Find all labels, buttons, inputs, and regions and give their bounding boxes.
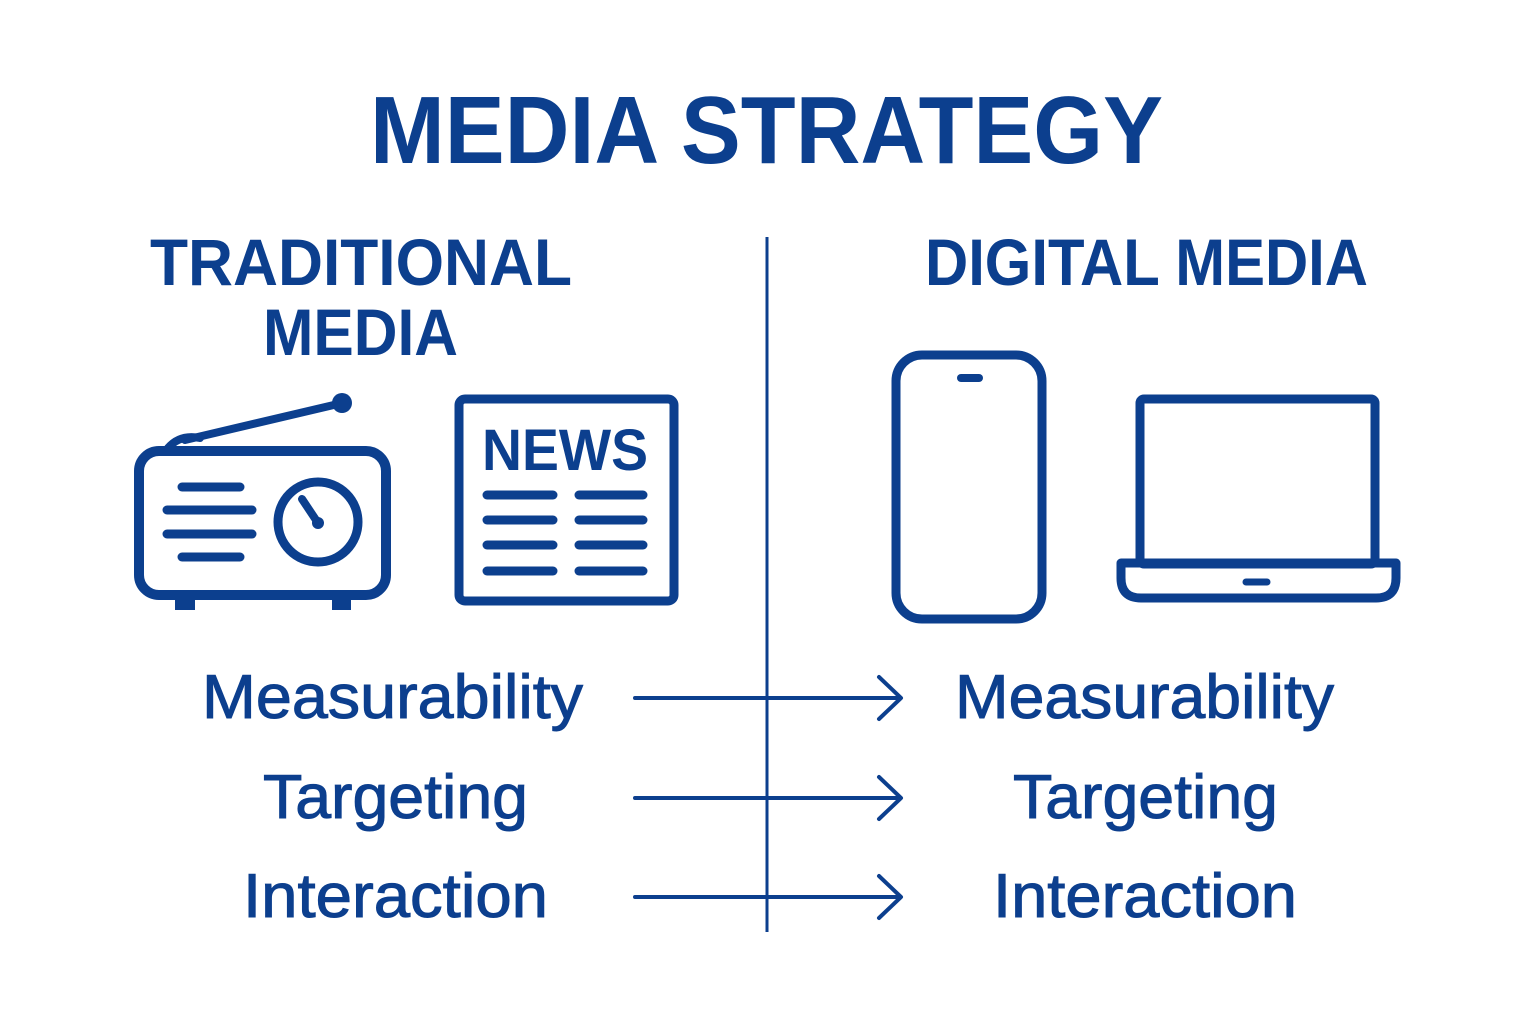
row: interaction [243,862,1297,931]
heading: traditional media: MEDIA [263,295,458,369]
icon: newspaper: NEWS [482,418,648,483]
heading: traditional media [150,225,572,369]
arrow: interaction [635,876,901,918]
icon: smartphone [896,355,1042,619]
row: interaction: Interaction [243,862,548,931]
row: targeting [263,763,1278,832]
heading: traditional media: TRADITIONAL [150,225,572,299]
heading: digital media: DIGITAL MEDIA [925,225,1368,299]
arrow: measurability [635,677,901,719]
divider line [766,237,768,932]
arrow: targeting [635,777,901,819]
row: interaction: Interaction [993,862,1297,931]
icon: radio [139,393,386,610]
icon: laptop [1121,399,1396,598]
row: measurability: Measurability [202,663,583,732]
row: measurability [202,663,1334,732]
row: targeting: Targeting [263,763,528,832]
row: targeting: Targeting [1013,763,1278,832]
title: MEDIA STRATEGY [370,77,1163,184]
row: measurability: Measurability [955,663,1334,732]
icon: newspaper [459,399,674,601]
